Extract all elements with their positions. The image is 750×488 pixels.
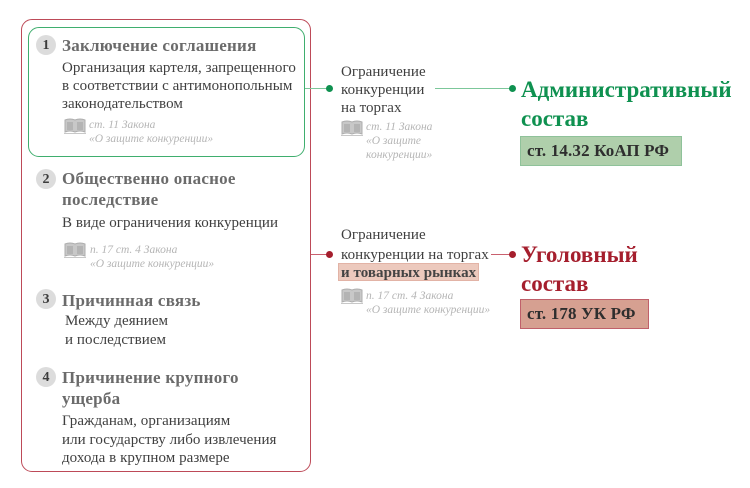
icon: book 1	[64, 118, 86, 134]
icon: book 2	[64, 242, 86, 258]
heading 2: последствие	[62, 190, 158, 209]
box: administrative article	[520, 136, 682, 166]
text 1: в соответствии с антимонопольным	[62, 78, 292, 94]
text: limitation on tenders	[341, 64, 426, 116]
box: criminal article	[520, 299, 649, 329]
icon: book 4	[341, 288, 363, 304]
reference 3	[366, 121, 432, 161]
panel: elements of offence	[21, 19, 311, 472]
heading 2	[62, 169, 236, 209]
reference 2: п. 17 ст. 4 Закона	[90, 244, 177, 256]
heading: criminal: состав	[521, 271, 588, 296]
reference 2: «О защите конкуренции»	[90, 258, 214, 270]
highlight: commodity markets: и товарных рынках	[341, 265, 476, 281]
dot: red left	[326, 251, 333, 258]
text 3: Между деянием	[65, 313, 168, 329]
number 2	[36, 169, 56, 189]
text 4: Гражданам, организациям	[62, 413, 230, 429]
reference 2	[90, 244, 214, 270]
dot: red right	[509, 251, 516, 258]
text 1: Организация картеля, запрещенного	[62, 60, 296, 76]
number 4	[36, 367, 56, 387]
heading: criminal	[521, 242, 638, 296]
number 2: 2	[42, 172, 50, 187]
box: administrative article: ст. 14.32 КоАП РФ	[527, 141, 669, 160]
connector: red left	[311, 254, 329, 255]
reference 4: п. 17 ст. 4 Закона	[366, 290, 453, 302]
text 4	[62, 413, 276, 466]
panel: highlighted element 1	[28, 27, 305, 157]
text 4: или государству либо извлечения	[62, 432, 276, 448]
text 1: законодательством	[62, 96, 183, 112]
text 3	[65, 313, 168, 348]
text: limitation on tenders: Ограничение	[341, 64, 426, 80]
number 4: 4	[42, 370, 50, 385]
reference 1	[89, 119, 213, 145]
number 1	[36, 35, 56, 55]
reference 3: ст. 11 Закона	[366, 121, 432, 133]
heading 2: Общественно опасное	[62, 169, 236, 188]
text: limitation on tenders and markets	[341, 227, 489, 263]
text: limitation on tenders and markets: конкуренции на торгах	[341, 247, 489, 263]
reference 4: «О защите конкуренции»	[366, 304, 490, 316]
heading: administrative: Административный	[521, 77, 732, 102]
heading 3: Причинная связь	[62, 291, 201, 310]
icon: book 3	[341, 120, 363, 136]
reference 1: «О защите конкуренции»	[89, 133, 213, 145]
heading: administrative	[521, 77, 732, 131]
connector: red right	[491, 254, 513, 255]
text 3: и последствием	[65, 332, 166, 348]
connector: green left	[305, 88, 329, 89]
number 3: 3	[42, 292, 50, 307]
reference 4	[366, 290, 490, 316]
box: criminal article: ст. 178 УК РФ	[527, 304, 636, 323]
dot: green right	[509, 85, 516, 92]
number 1: 1	[42, 38, 50, 53]
heading 4: Причинение крупного	[62, 368, 239, 387]
heading 4: ущерба	[62, 389, 120, 408]
text: limitation on tenders and markets: Ограничение	[341, 227, 426, 243]
reference 3: «О защите	[366, 135, 421, 147]
connector: green right	[435, 88, 513, 89]
number 3	[36, 289, 56, 309]
dot: green left	[326, 85, 333, 92]
heading: administrative: состав	[521, 106, 588, 131]
text: limitation on tenders: конкуренции	[341, 82, 424, 98]
text 4: дохода в крупном размере	[62, 450, 230, 466]
heading 1: Заключение соглашения	[62, 36, 257, 55]
reference 3: конкуренции»	[366, 149, 432, 161]
text 1	[62, 60, 296, 112]
text 2: В виде ограничения конкуренции	[62, 215, 278, 231]
heading: criminal: Уголовный	[521, 242, 638, 267]
text: limitation on tenders: на торгах	[341, 100, 402, 116]
heading 4	[62, 368, 239, 408]
reference 1: ст. 11 Закона	[89, 119, 155, 131]
